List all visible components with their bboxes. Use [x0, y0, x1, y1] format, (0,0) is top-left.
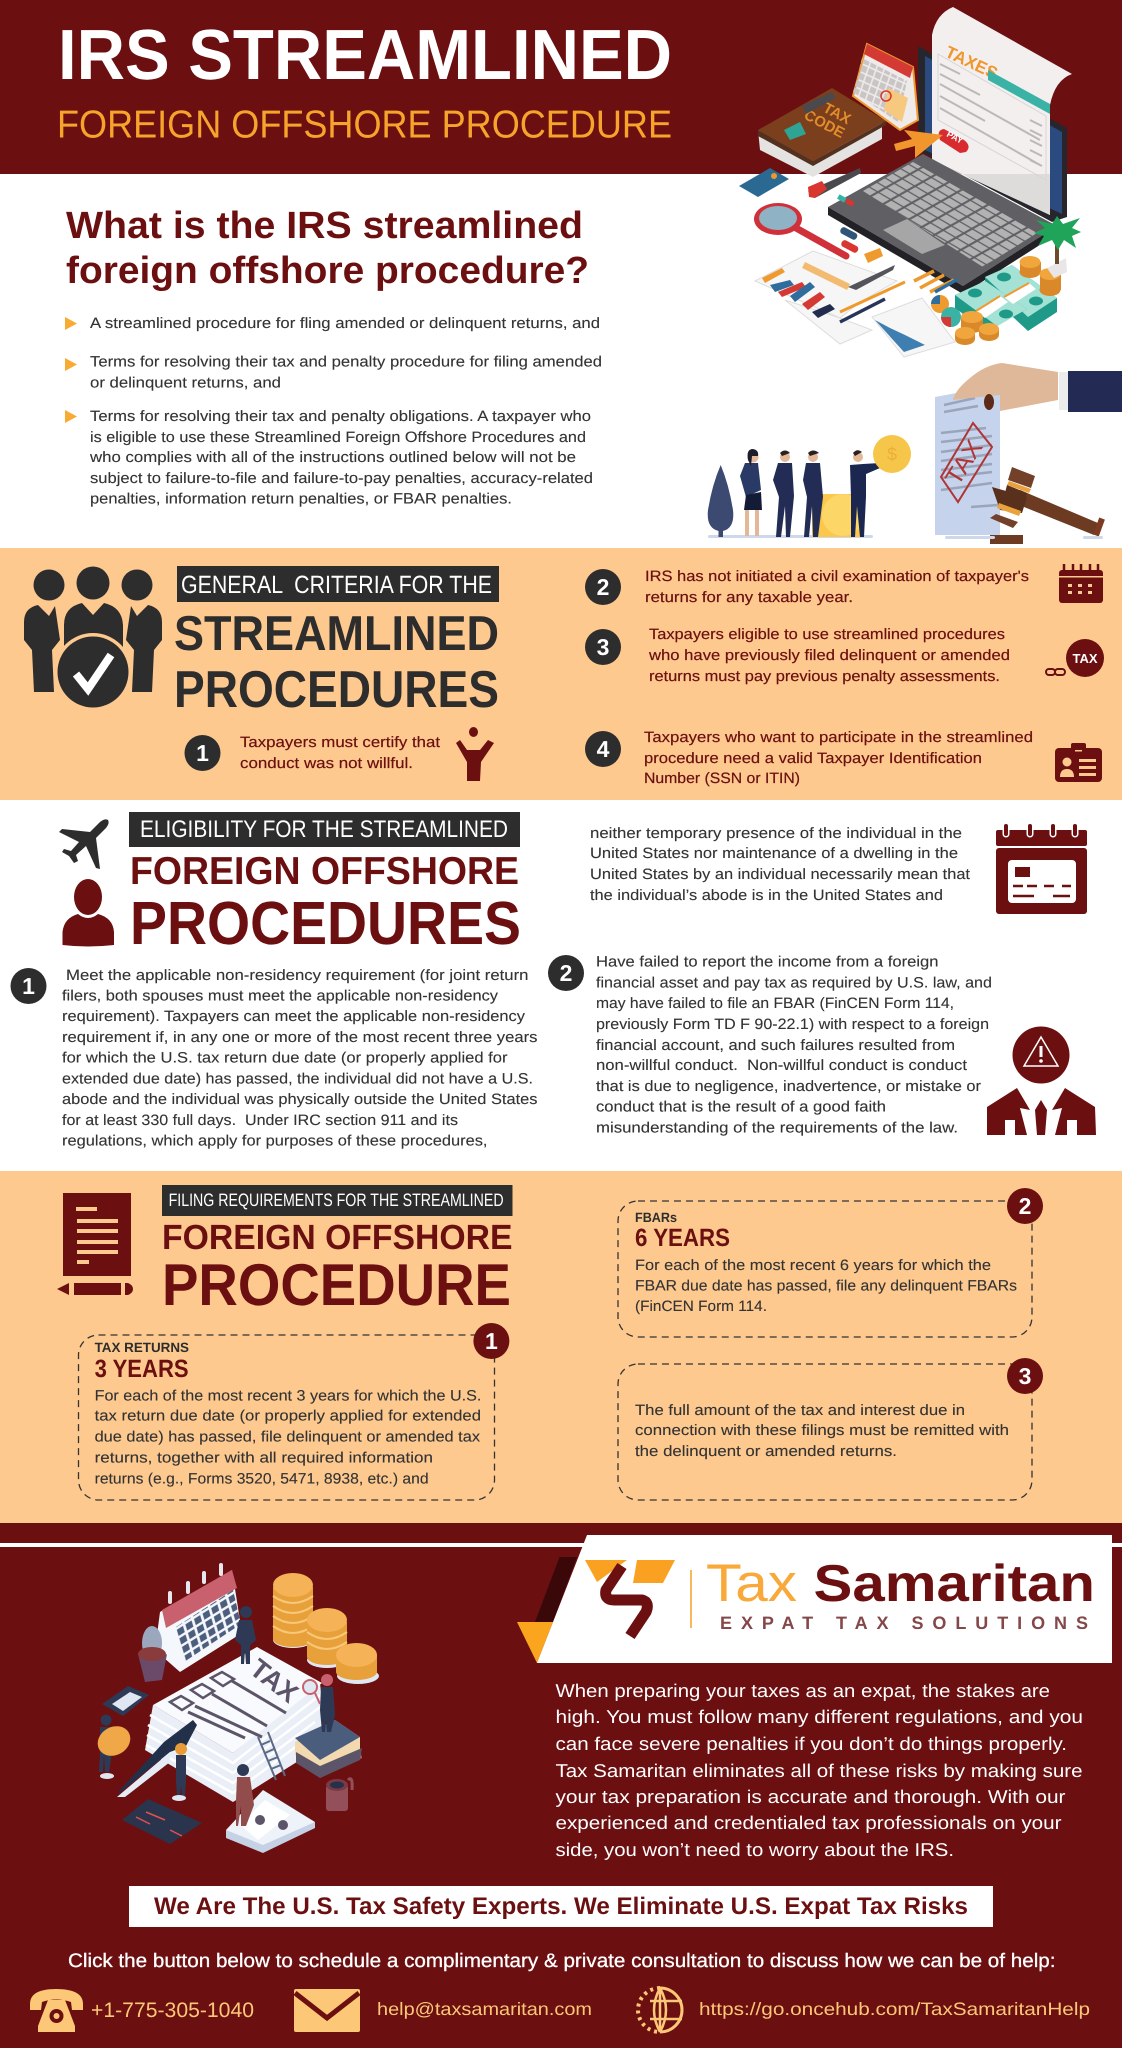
- criterion 3: Taxpayers eligible to use streamlined procedures: [649, 626, 1005, 643]
- desk calendar: [853, 44, 918, 130]
- requirement 2: non-willful conduct. Non-willful conduct is conduct: [596, 1057, 968, 1074]
- card 1: tax returns: due date) has passed, file delinquent or amended tax: [95, 1429, 481, 1446]
- card 1: tax returns: tax return due date (or properly applied for extended: [95, 1408, 481, 1425]
- criterion 4: 4: [597, 736, 610, 762]
- panel: filing requirements: [57, 1185, 1043, 1500]
- requirement 1 continued: the individual’s abode is in the United States and: [590, 887, 943, 904]
- requirement 2: misunderstanding of the requirements of the law.: [596, 1119, 958, 1136]
- requirement 1: 1: [22, 973, 35, 999]
- requirement 1: requirement). Taxpayers can meet the applicable non-residency: [62, 1008, 526, 1025]
- bullet 2: Terms for resolving their tax and penalty procedure for filing amended: [90, 354, 602, 370]
- company description: When preparing your taxes as an expat, the stakes are: [556, 1680, 1050, 1701]
- bullet 3: penalties, information return penalties, or FBAR penalties.: [90, 490, 512, 508]
- card 1: tax returns: [78, 1323, 509, 1500]
- card 3: full amount: connection with these filings must be remitted with: [635, 1422, 1009, 1439]
- laptop screen: [918, 46, 1067, 222]
- people check icon: [24, 566, 162, 711]
- dark footer band: [0, 1523, 1122, 2048]
- red marker: [808, 168, 861, 198]
- tagline box: [129, 1886, 993, 1927]
- potted palm: [1034, 216, 1081, 278]
- criterion 3: returns must pay previous penalty assessments.: [649, 668, 1000, 685]
- heading: PROCEDURES: [174, 661, 499, 719]
- tax stamp: TAX: [940, 435, 989, 490]
- logo banner: [517, 1535, 1112, 1663]
- hand and sleeve: [953, 363, 1122, 412]
- card 3: full amount: the delinquent or amended returns.: [635, 1443, 897, 1460]
- ground shadows: [945, 536, 995, 539]
- taxes paper: TAXES: [942, 42, 1001, 83]
- contact: website: [638, 1988, 1090, 2032]
- tax code book: TAX: [820, 100, 854, 128]
- cash stacks: [955, 265, 1057, 339]
- heading label: [129, 812, 520, 847]
- section heading: what is the procedure: foreign offshore procedure?: [66, 250, 589, 292]
- contact: email: [294, 1989, 592, 2032]
- criterion 1: [184, 734, 441, 772]
- criterion 1: Taxpayers must certify that: [240, 734, 441, 751]
- pay button: [939, 129, 969, 153]
- card 2: FBARs: FBAR due date has passed, file any delinquent FBARs: [635, 1278, 1017, 1295]
- card 1: tax returns: 3 YEARS: [95, 1355, 189, 1383]
- line chart paper with pie charts: [872, 295, 961, 357]
- panel: general criteria: [24, 564, 1104, 787]
- illustration: laptop and tax paperwork: [739, 7, 1081, 357]
- criterion 3: 3: [597, 634, 609, 660]
- section heading: what is the procedure: What is the IRS streamlined: [66, 205, 583, 247]
- heading: [130, 850, 521, 957]
- potted cactus: [138, 1626, 167, 1682]
- bullet 1: A streamlined procedure for fling amended or delinquent returns, and: [90, 315, 600, 332]
- title: [57, 16, 672, 146]
- requirement 2: 2: [560, 960, 572, 986]
- white parallelogram: [537, 1535, 1112, 1663]
- requirement 2: may have failed to file an FBAR (FinCEN Form 114,: [596, 995, 954, 1012]
- card 3: full amount: [618, 1358, 1043, 1500]
- logo wordmark: Tax: [706, 1554, 797, 1613]
- bullet 3: subject to failure-to-file and failure-to-pay penalties, accuracy-related: [90, 470, 593, 487]
- icon: tax chain: [1046, 639, 1104, 677]
- heading label: GENERAL CRITERIA FOR THE: [181, 571, 492, 599]
- heading: FOREIGN OFFSHORE: [162, 1218, 512, 1257]
- tagline box: We Are The U.S. Tax Safety Experts. We Eliminate U.S. Expat Tax Risks: [154, 1893, 968, 1920]
- requirement 2: financial asset and pay tax as required by U.S. law, and: [596, 974, 992, 991]
- cursor arrow: [894, 130, 943, 158]
- requirement 1: filers, both spouses must meet the applicable non-residency: [62, 988, 499, 1005]
- requirement 1 continued: [590, 825, 971, 904]
- gold coin: [873, 435, 911, 473]
- ladder: [258, 1732, 285, 1780]
- bullet 2: or delinquent returns, and: [90, 374, 281, 392]
- logo mark: [585, 1560, 692, 1636]
- icon: person: [62, 879, 114, 946]
- title: IRS STREAMLINED: [58, 16, 672, 95]
- card 3: full amount: The full amount of the tax and interest due in: [635, 1402, 965, 1419]
- criterion 4: Number (SSN or ITIN): [644, 770, 800, 787]
- person with coin: [92, 1714, 136, 1779]
- requirement 2: previously Form TD F 90-22.1) with respect to a foreign: [596, 1016, 989, 1033]
- icon: document and pen: [57, 1193, 133, 1295]
- requirement 1: Meet the applicable non-residency requirement (for joint return: [66, 967, 528, 984]
- requirement 2: that is due to negligence, inadvertence, or mistake or: [596, 1078, 981, 1095]
- illustration: business people with coins: [708, 435, 911, 538]
- icon: id badge: [1055, 743, 1102, 782]
- criterion 4: Taxpayers who want to participate in the streamlined: [644, 729, 1033, 746]
- header band: [0, 0, 1122, 174]
- bullet 3: is eligible to use these Streamlined Foreign Offshore Procedures and: [90, 429, 586, 446]
- contact: phone: +1-775-305-1040: [91, 1999, 254, 2022]
- company description: side, you won’t need to worry about the IRS.: [556, 1839, 954, 1860]
- criterion 2: returns for any taxable year.: [645, 589, 853, 606]
- criterion 2: IRS has not initiated a civil examination of taxpayer's: [645, 568, 1029, 585]
- laptop keyboard: [828, 154, 1057, 294]
- coin stacks: [273, 1573, 379, 1684]
- card 2: FBARs: 2: [1019, 1193, 1031, 1219]
- icon: shrugging person: [456, 727, 494, 781]
- contact: website: https://go.oncehub.com/TaxSamaritanHelp: [699, 1999, 1090, 2019]
- credit card: [122, 1799, 202, 1844]
- gold coin piles: [955, 256, 1061, 345]
- man two: [803, 450, 823, 537]
- company description: can face severe penalties if you don’t do things properly.: [556, 1733, 1067, 1754]
- heading: [174, 607, 499, 719]
- card 1: tax returns: For each of the most recent 3 years for which the U.S.: [95, 1388, 481, 1405]
- criterion 1: conduct was not willful.: [240, 755, 413, 772]
- card 2: FBARs: [618, 1188, 1043, 1337]
- requirement 1: regulations, which apply for purposes of these procedures,: [62, 1133, 488, 1150]
- icon: calendar: [1059, 564, 1103, 603]
- heading label: [177, 566, 499, 602]
- peach band: general criteria background: [0, 548, 1122, 800]
- tax code book: [758, 88, 886, 177]
- tree: [708, 465, 733, 537]
- requirement 2: Have failed to report the income from a foreign: [596, 954, 938, 971]
- small pens and eraser: [839, 226, 883, 263]
- books: [295, 1720, 362, 1778]
- woman holding pen: [172, 1743, 187, 1801]
- heading: FOREIGN OFFSHORE: [130, 850, 519, 893]
- orange wedge: [517, 1622, 553, 1663]
- card 1: tax returns: 1: [485, 1328, 498, 1354]
- heading label: [162, 1185, 512, 1216]
- card 3: full amount: 3: [1019, 1363, 1031, 1389]
- requirement 1: for at least 330 full days. Under IRC section 911 and its: [62, 1112, 458, 1129]
- call to action: Click the button below to schedule a complimentary & private consultation to discuss how we can be of help:: [68, 1950, 1056, 1972]
- criterion 3: [585, 626, 1010, 685]
- woman: [740, 449, 762, 536]
- logo wordmark: Samaritan: [814, 1555, 1095, 1613]
- ground shadow: [708, 535, 873, 538]
- requirement 1: requirement if, in any one or more of the most recent three years: [62, 1029, 538, 1046]
- footer white rule: [0, 1543, 1122, 1547]
- contact: email: help@taxsamaritan.com: [377, 1999, 592, 2019]
- calendar: [155, 1565, 242, 1672]
- card 2: FBARs: For each of the most recent 6 years for which the: [635, 1257, 991, 1274]
- requirement 1 continued: United States by an individual necessarily mean that: [590, 866, 971, 883]
- gold coin: $: [887, 444, 897, 464]
- bullet 3: Terms for resolving their tax and penalty obligations. A taxpayer who: [90, 408, 591, 425]
- illustration: tax paper stack with small people: [92, 1565, 379, 1853]
- section heading: what is the procedure: [66, 205, 589, 292]
- checklist: [170, 1672, 234, 1710]
- big coin: [812, 494, 864, 537]
- taxes paper: [932, 7, 1072, 215]
- money bundles: [226, 1790, 315, 1853]
- requirement 1 continued: United States nor maintenance of a dwelling in the: [590, 845, 958, 862]
- requirement 1: [10, 967, 538, 1150]
- company description: experienced and credentialed tax professionals on your: [556, 1812, 1062, 1833]
- pen: [117, 1720, 197, 1797]
- credit card: [739, 168, 789, 197]
- icon: tax chain: TAX: [1072, 651, 1098, 666]
- paper stack: [145, 1647, 325, 1802]
- bullet 3: who complies with all of the instructions outlined below will not be: [89, 449, 576, 466]
- bar chart papers: [755, 251, 958, 344]
- heading: PROCEDURE: [162, 1252, 511, 1318]
- logo wordmark: [706, 1554, 1095, 1633]
- requirement 1 continued: neither temporary presence of the individual in the: [590, 825, 962, 842]
- icon: airplane: [59, 819, 109, 869]
- requirement 1: extended due date) has passed, the individual did not have a U.S.: [62, 1070, 533, 1087]
- heading: [162, 1218, 512, 1318]
- icon: warning person: [987, 1026, 1096, 1135]
- bullet 3: [65, 408, 593, 508]
- contact: phone: [30, 1989, 254, 2032]
- heading label: FILING REQUIREMENTS FOR THE STREAMLINED: [169, 1190, 504, 1210]
- heading: STREAMLINED: [174, 607, 499, 661]
- paper stack: TAX: [244, 1653, 304, 1709]
- card 2: FBARs: FBARs: [635, 1210, 677, 1225]
- document lines: [941, 398, 998, 507]
- illustration: tax document and gavel: [935, 363, 1122, 544]
- man with money: [236, 1764, 254, 1826]
- man standing on paper: [235, 1606, 256, 1664]
- man three handing coin: [850, 450, 880, 537]
- logo wordmark: EXPAT TAX SOLUTIONS: [720, 1613, 1088, 1633]
- company description: your tax preparation is accurate and thorough. With our: [556, 1786, 1066, 1807]
- requirement 1: abode and the individual was physically outside the United States: [62, 1091, 538, 1108]
- criterion 1: 1: [196, 740, 209, 766]
- dark slash: [535, 1557, 577, 1622]
- criterion 2: 2: [597, 574, 609, 600]
- company description: Tax Samaritan eliminates all of these risks by making sure: [556, 1760, 1082, 1781]
- icon: large calendar: [996, 826, 1087, 914]
- requirement 2: [548, 954, 992, 1136]
- tax code book: CODE: [801, 107, 847, 142]
- requirement 2: conduct that is the result of a good faith: [596, 1099, 886, 1116]
- bullet 2: [65, 354, 602, 392]
- icon: envelope: [294, 1989, 360, 2032]
- heading: PROCEDURES: [130, 889, 521, 957]
- title: FOREIGN OFFSHORE PROCEDURE: [57, 104, 672, 146]
- requirement 2: financial account, and such failures resulted from: [596, 1037, 955, 1054]
- company description: [556, 1680, 1083, 1860]
- tax stamp: [940, 423, 992, 502]
- heading label: ELIGIBILITY FOR THE STREAMLINED: [140, 816, 508, 843]
- criterion 4: [585, 729, 1033, 787]
- card 1: tax returns: returns (e.g., Forms 3520, 5471, 8938, etc.) and: [95, 1470, 429, 1487]
- panel: eligibility: [10, 812, 1096, 1150]
- card 2: FBARs: 6 YEARS: [635, 1224, 730, 1252]
- card 2: FBARs: (FinCEN Form 114.: [635, 1298, 767, 1315]
- requirement 1: for which the U.S. tax return due date (or properly applied for: [62, 1050, 508, 1067]
- pay button: PAY: [945, 129, 965, 146]
- magnifying glass: [754, 203, 846, 256]
- icon: telephone: [30, 1989, 83, 2032]
- criterion 4: procedure need a valid Taxpayer Identification: [644, 750, 982, 767]
- document: [935, 385, 1000, 535]
- peach band: filing requirements background: [0, 1171, 1122, 1523]
- mug: [326, 1779, 352, 1811]
- criterion 3: who have previously filed delinquent or amended: [648, 647, 1010, 664]
- gavel: [990, 467, 1105, 544]
- man one: [773, 450, 794, 537]
- card 1: tax returns: TAX RETURNS: [95, 1340, 189, 1355]
- company description: high. You must follow many different regulations, and you: [556, 1706, 1083, 1727]
- woman with magnifier: [303, 1674, 335, 1732]
- icon: globe: [638, 1988, 682, 2032]
- criterion 2: [585, 568, 1029, 606]
- calculator: [102, 1686, 149, 1716]
- card 1: tax returns: returns, together with all required information: [95, 1449, 433, 1466]
- bullet list: [65, 315, 602, 508]
